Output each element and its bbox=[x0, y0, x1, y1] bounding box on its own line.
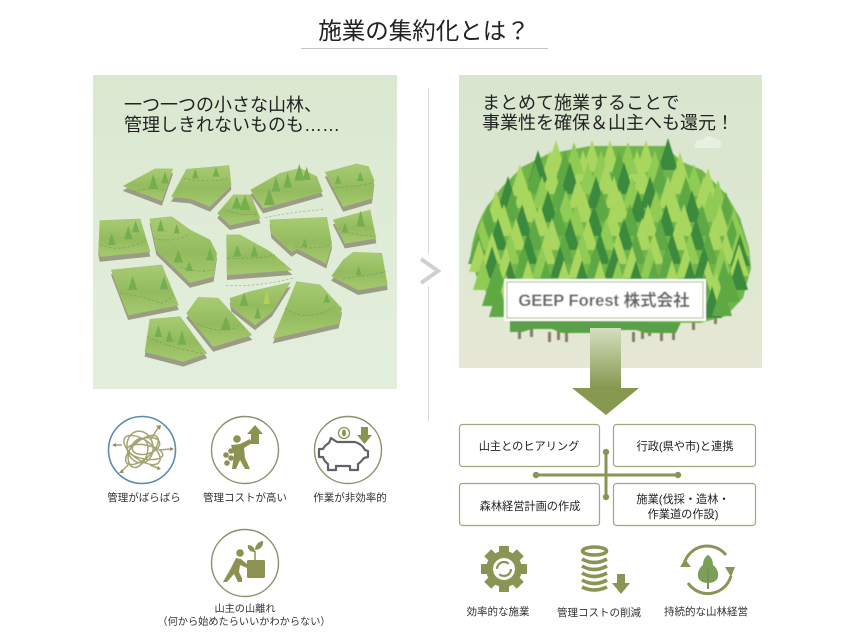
label: 管理がばらばら bbox=[107, 491, 181, 504]
map of forest parcels bbox=[99, 164, 387, 366]
box: plan: 森林経営計画の作成 bbox=[480, 499, 580, 513]
label: 効率的な施業 bbox=[466, 605, 530, 618]
arrow: chevron between panels bbox=[418, 254, 444, 286]
label: 持続的な山林経営 bbox=[664, 605, 748, 618]
label: company name: GEEP Forest 株式会社 bbox=[518, 291, 690, 310]
title: 施業の集約化とは？ bbox=[318, 18, 530, 44]
arrow: down bbox=[572, 328, 639, 415]
box: hearing bbox=[460, 424, 600, 466]
cloud bbox=[695, 136, 721, 148]
icon: coin stack with down arrow bbox=[582, 547, 630, 594]
box: operations: 施業(伐採・造林・ bbox=[636, 492, 730, 506]
box: hearing: 山主とのヒアリング bbox=[479, 439, 579, 453]
panel: consolidated forest bbox=[459, 75, 762, 368]
label: 管理コストの削減 bbox=[557, 606, 641, 619]
illustration: large forest bbox=[468, 138, 751, 342]
label: （何から始めたらいいかわからない） bbox=[157, 615, 331, 628]
divider bbox=[428, 88, 429, 421]
icon: owner leaving the forest bbox=[212, 530, 278, 596]
tree rows, back to front bbox=[468, 138, 750, 318]
icon: piggy bank inefficiency bbox=[314, 416, 382, 484]
panel: scattered small forests bbox=[93, 75, 397, 389]
box: plan bbox=[460, 484, 600, 526]
heading: left panel: 管理しきれないものも…… bbox=[124, 115, 340, 135]
heading: right panel: まとめて施業することで bbox=[482, 93, 679, 113]
label: 管理コストが高い bbox=[203, 491, 287, 504]
icon: scattered management bbox=[108, 416, 176, 484]
icon: high management cost bbox=[212, 416, 278, 484]
label: 山主の山離れ bbox=[214, 602, 276, 615]
connector cross bbox=[533, 449, 681, 500]
heading: left panel: 一つ一つの小さな山林、 bbox=[124, 95, 322, 115]
label: 作業が非効率的 bbox=[313, 491, 387, 504]
heading: right panel: 事業性を確保＆山主へも還元！ bbox=[482, 113, 734, 133]
icon: tree with cycle arrows bbox=[680, 546, 735, 594]
icon: gear bbox=[481, 546, 527, 592]
label: company name bbox=[504, 279, 706, 321]
process: four boxes bbox=[460, 424, 756, 526]
box: operations bbox=[614, 484, 756, 526]
icon group: benefits bbox=[466, 546, 748, 619]
box: government bbox=[614, 424, 756, 466]
icon group: problems bbox=[107, 416, 387, 628]
box: government: 行政(県や市)と連携 bbox=[637, 439, 733, 453]
box: operations: 作業道の作設) bbox=[648, 507, 719, 521]
